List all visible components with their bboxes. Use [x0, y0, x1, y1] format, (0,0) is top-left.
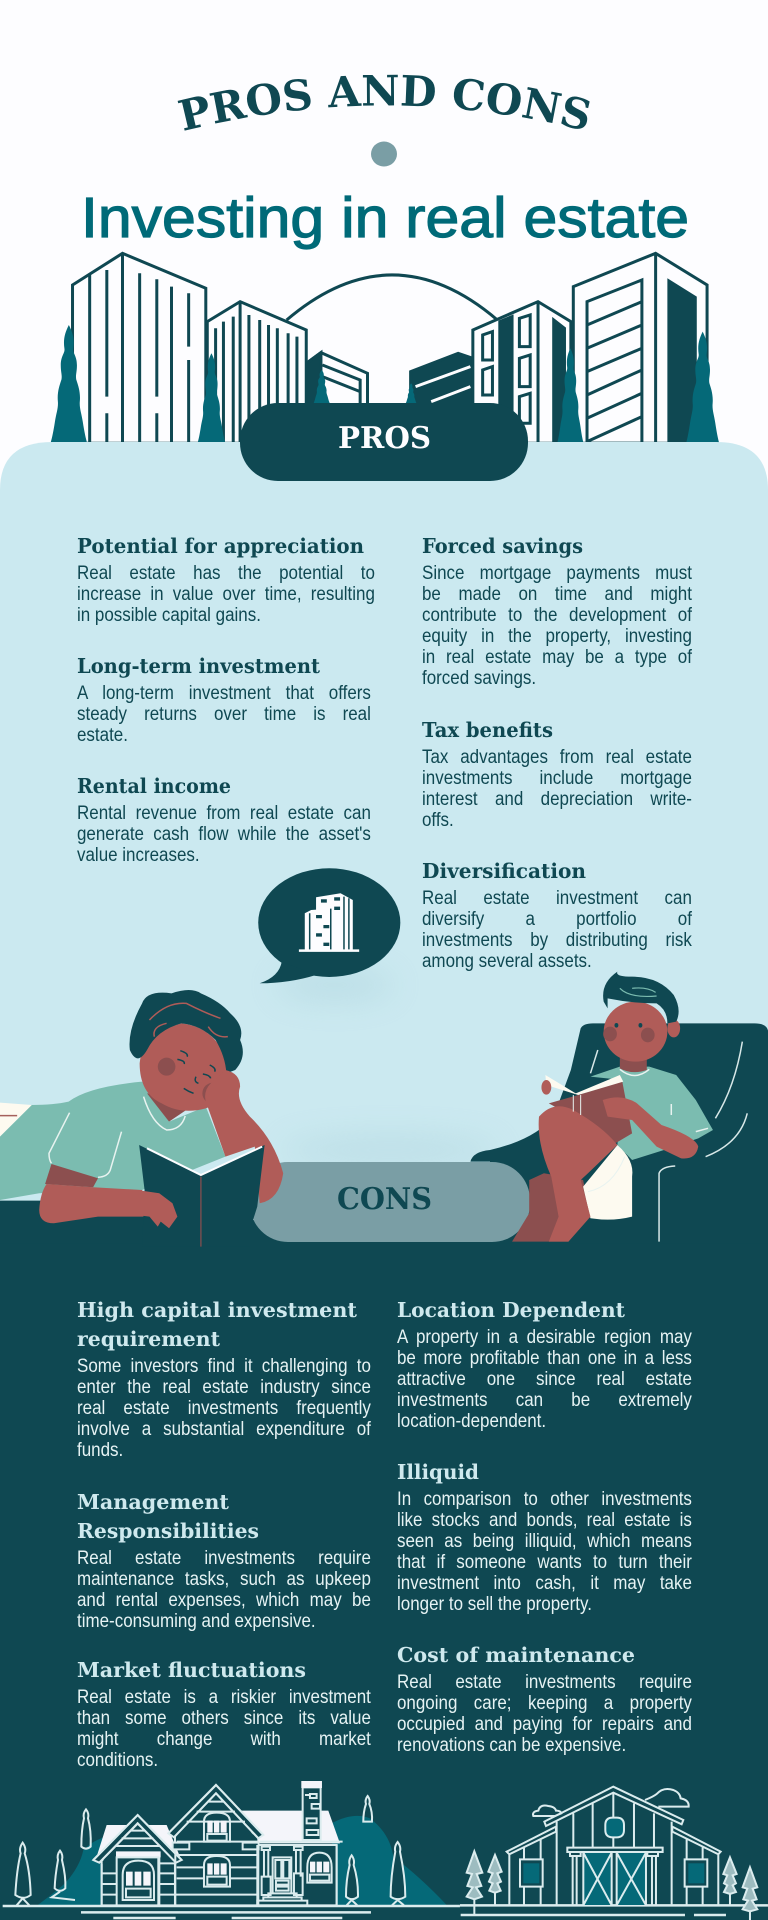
cons: management responsibilities: Real estate investments require [77, 1548, 371, 1568]
pros: tax benefits: investments include mortgage [422, 768, 692, 789]
pros: diversification [422, 859, 692, 972]
cons pill [250, 1162, 530, 1242]
cons: high capital investment requirement: Some investors find it challenging to [77, 1356, 371, 1376]
title: pros and cons: PROS AND CONS [178, 74, 590, 131]
cons: location dependent: investments can be extremely [397, 1390, 692, 1411]
speech bubble with building icon [258, 868, 400, 983]
cons: market fluctuations: might change with market [77, 1729, 371, 1750]
cons: management responsibilities: maintenance tasks, such as upkeep [77, 1569, 371, 1590]
pros: rental income: value increases. [77, 845, 200, 866]
pros: diversification: diversify a portfolio of [422, 909, 692, 930]
cons: high capital investment requirement: real estate investments frequently [77, 1398, 371, 1419]
subtitle: Investing in real estate [81, 186, 689, 250]
illustration: boy reading in armchair [512, 972, 713, 1242]
pros: tax benefits [422, 718, 692, 831]
cons: illiquid: In comparison to other investments [397, 1488, 692, 1510]
cons: high capital investment requirement: involve a substantial expenditure of [77, 1419, 371, 1440]
cons: market fluctuations: conditions. [77, 1750, 158, 1771]
pros: tax benefits: Tax benefits [422, 718, 553, 742]
soft shadows [275, 969, 500, 1164]
pros: long-term investment: estate. [77, 725, 128, 746]
cons: high capital investment requirement [77, 1298, 371, 1461]
cons: high capital investment requirement: requirement [77, 1327, 221, 1351]
pros: long-term investment: Long-term investment [77, 654, 320, 678]
pros: long-term investment [77, 654, 371, 746]
pros: forced savings: Since mortgage payments must [422, 562, 692, 584]
pros: potential for appreciation: in possible capital gains. [77, 605, 261, 626]
pros: potential for appreciation: Potential for appreciation [77, 534, 364, 558]
cons: market fluctuations: Market fluctuations [77, 1658, 306, 1682]
armchair [470, 1023, 768, 1243]
cons: cost of maintenance [397, 1643, 692, 1756]
cons: management responsibilities: Management [77, 1490, 230, 1514]
cons: high capital investment requirement: High capital investment [77, 1298, 358, 1322]
panel: cons background [0, 1220, 768, 1920]
pros: forced savings: Forced savings [422, 534, 583, 558]
pros: forced savings: in real estate may be a type of [422, 647, 692, 668]
skyline illustration [73, 253, 707, 443]
cons: location dependent: attractive one since real estate [397, 1369, 692, 1390]
pros: tax benefits: offs. [422, 810, 454, 831]
cons: location dependent: Location Dependent [397, 1298, 626, 1322]
pros: rental income: Rental revenue from real estate can [77, 802, 371, 824]
cons: illiquid: longer to sell the property. [397, 1594, 592, 1615]
pros pill: PROS [338, 421, 431, 456]
cons: market fluctuations: than some others since its value [77, 1708, 371, 1729]
illustration: barn [460, 1787, 768, 1920]
pros: diversification: Diversification [422, 859, 586, 883]
pros: diversification: investments by distributing risk [422, 930, 692, 951]
trees beside the skyline [50, 325, 719, 443]
illustration: man reading on sofa [0, 990, 283, 1247]
cons: management responsibilities: Responsibilities [77, 1519, 259, 1543]
pros: rental income: Rental income [77, 774, 231, 798]
pros: forced savings [422, 534, 692, 689]
cons: cost of maintenance: renovations can be expensive. [397, 1735, 626, 1756]
cons: illiquid [397, 1460, 692, 1615]
cons: management responsibilities [77, 1490, 371, 1632]
pros: tax benefits: Tax advantages from real estate [422, 746, 692, 768]
pros pill [240, 403, 528, 481]
illustration: house [3, 1781, 460, 1918]
cons: location dependent: be more profitable than one in a less [397, 1348, 692, 1369]
cons: market fluctuations [77, 1658, 371, 1771]
pros: forced savings: equity in the property, investing [422, 626, 692, 647]
cons: management responsibilities: and rental expenses, which may be [77, 1590, 371, 1611]
cons: location dependent: location-dependent. [397, 1411, 546, 1432]
pros: forced savings: be made on time and might [422, 584, 692, 605]
cons: illiquid: like stocks and bonds, real estate is [397, 1510, 692, 1531]
pros: forced savings: contribute to the development of [422, 605, 692, 626]
cons pill: CONS [337, 1182, 432, 1217]
pros: rental income: generate cash flow while the asset's [77, 824, 371, 845]
cons: high capital investment requirement: enter the real estate industry since [77, 1377, 371, 1398]
title dot [371, 142, 397, 166]
pros: potential for appreciation: Real estate has the potential to [77, 562, 375, 584]
cons: illiquid: seen as being illiquid, which means [397, 1531, 692, 1552]
pros: tax benefits: interest and depreciation write- [422, 789, 692, 810]
cons: cost of maintenance: Cost of maintenance [397, 1643, 635, 1667]
cons: location dependent: A property in a desirable region may [397, 1326, 692, 1348]
pros: potential for appreciation [77, 534, 375, 626]
pros: rental income [77, 774, 371, 866]
cons: cost of maintenance: ongoing care; keeping a property [397, 1693, 692, 1714]
cons: high capital investment requirement: funds. [77, 1440, 123, 1461]
cons: illiquid: Illiquid [397, 1460, 479, 1484]
pros: potential for appreciation: increase in value over time, resulting [77, 584, 375, 605]
cons: market fluctuations: Real estate is a riskier investment [77, 1686, 371, 1708]
cons: management responsibilities: time-consuming and expensive. [77, 1611, 316, 1632]
pros: diversification: Real estate investment can [422, 888, 692, 908]
pros: long-term investment: A long-term investment that offers [77, 682, 371, 704]
pros: diversification: among several assets. [422, 951, 592, 972]
panel: pros background [0, 442, 768, 1300]
cons: cost of maintenance: occupied and paying for repairs and [397, 1714, 692, 1735]
cons: illiquid: investment into cash, it may take [397, 1573, 692, 1594]
cons: cost of maintenance: Real estate investments require [397, 1672, 692, 1692]
pros: long-term investment: steady returns over time is real [77, 704, 371, 725]
cons: illiquid: that if someone wants to turn their [397, 1552, 692, 1573]
cons: location dependent [397, 1298, 692, 1432]
pros: forced savings: forced savings. [422, 668, 536, 689]
